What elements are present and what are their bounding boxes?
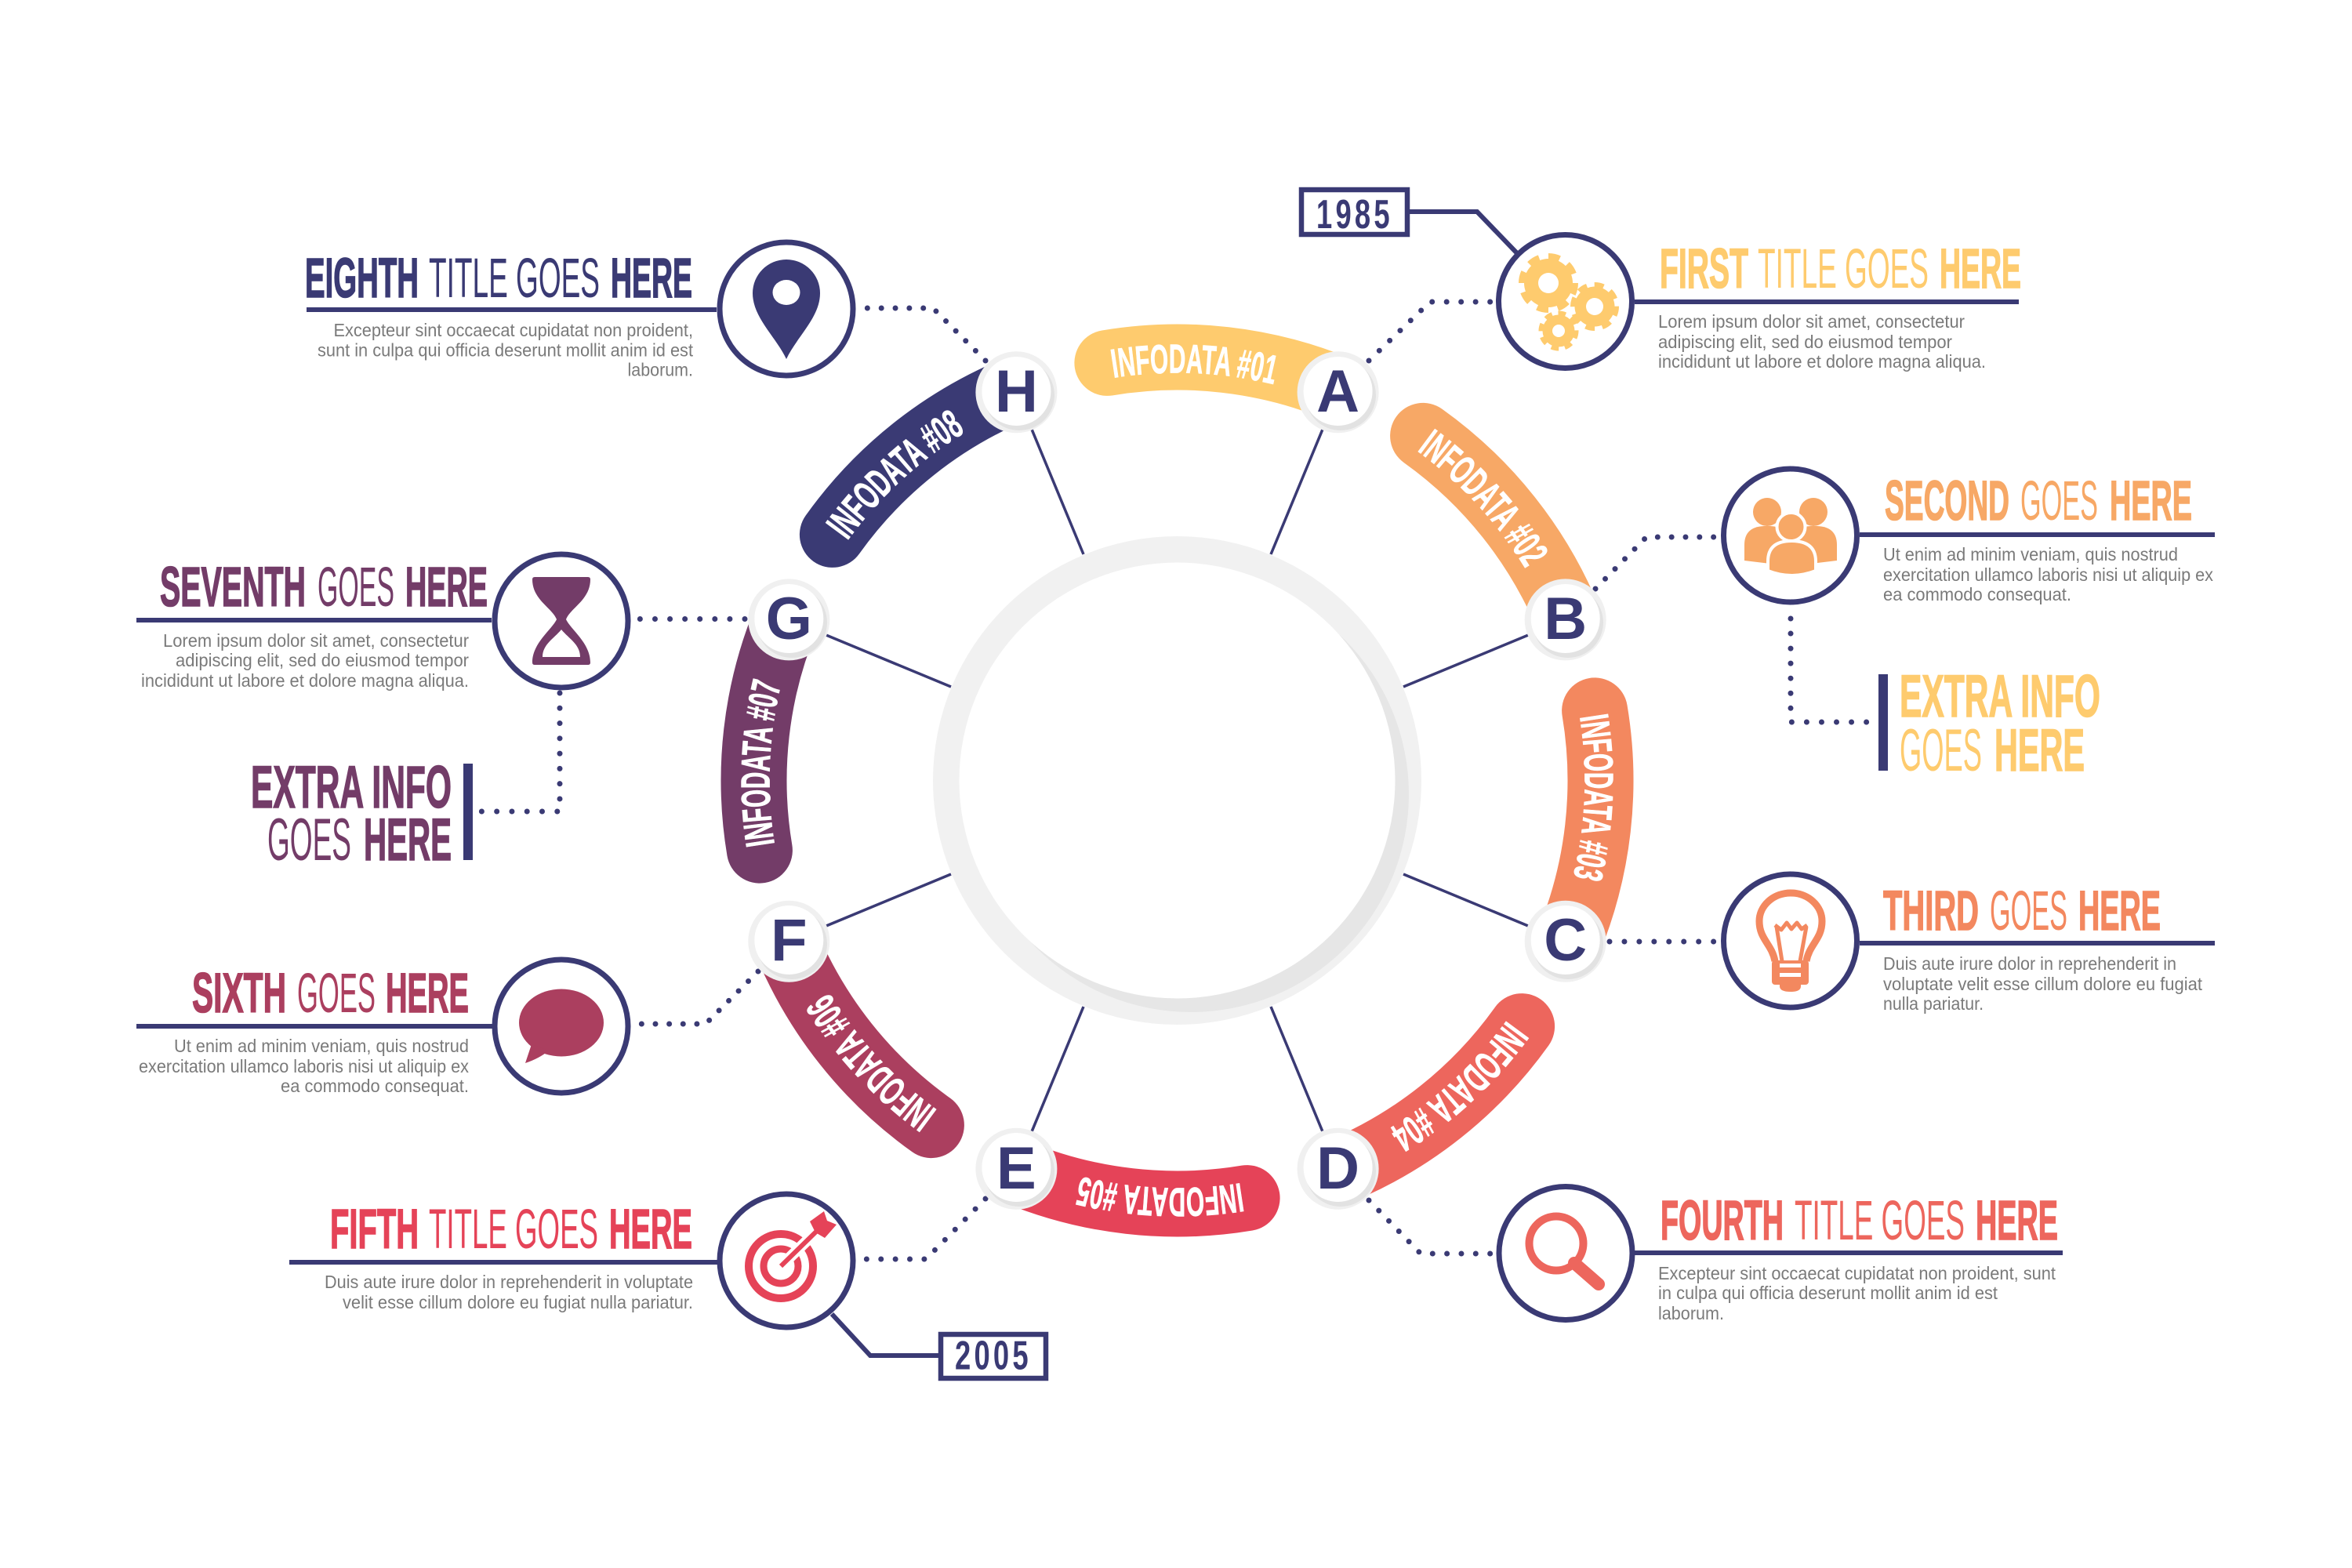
node A: A — [1316, 358, 1359, 425]
title — [330, 1199, 692, 1261]
body text — [1658, 311, 1986, 372]
node D — [1298, 1128, 1379, 1210]
icon: location pin — [720, 242, 853, 376]
body text — [318, 320, 694, 379]
dotted connector E — [866, 1199, 985, 1259]
title — [1660, 238, 2021, 300]
node C: C — [1544, 907, 1587, 974]
year tag 2005 — [832, 1314, 1046, 1378]
title: SECOND — [1885, 470, 2009, 532]
body text: Duis aute irure dolor in reprehenderit in voluptate — [325, 1272, 693, 1292]
title: GOES — [318, 557, 394, 619]
node D: D — [1316, 1135, 1359, 1202]
title: HERE — [1940, 238, 2021, 300]
panel: sixth — [136, 960, 628, 1096]
icon: light bulb — [1723, 874, 1857, 1007]
icon: hourglass — [495, 554, 628, 688]
band: infodata 02: INFODATA #02 — [1417, 428, 1548, 568]
title: HERE — [1976, 1190, 2058, 1252]
body text: velit esse cillum dolore eu fugiat nulla pariatur. — [343, 1292, 693, 1312]
dotted connector C — [1610, 939, 1714, 944]
band: infodata 04: INFODATA #04 — [1391, 1021, 1529, 1152]
year tag 2005: 2005 — [955, 1332, 1032, 1378]
title: SEVENTH — [160, 557, 306, 619]
body text: laborum. — [627, 359, 693, 379]
rule — [1860, 941, 2215, 946]
title: HERE — [2110, 470, 2192, 532]
body text: Lorem ipsum dolor sit amet, consectetur — [1658, 311, 1965, 332]
body text: laborum. — [1658, 1303, 1724, 1323]
dotted connector H — [867, 308, 985, 361]
title — [1661, 1190, 2058, 1252]
body text: incididunt ut labore et dolore magna aliqua. — [141, 670, 469, 691]
extra info right: HERE — [1994, 717, 2085, 784]
title — [192, 963, 469, 1025]
panel: third — [1723, 874, 2215, 1014]
node F: F — [771, 907, 808, 974]
band: infodata 07: INFODATA #07 — [741, 678, 780, 847]
extra info left: EXTRA INFO — [251, 754, 452, 821]
band: infodata 07 — [721, 624, 808, 882]
icon: target — [720, 1194, 853, 1327]
extra info right: EXTRA INFO — [1900, 663, 2100, 730]
body text: adipiscing elit, sed do eiusmod tempor — [1658, 332, 1952, 352]
node G: G — [766, 586, 812, 652]
node E: E — [996, 1135, 1036, 1202]
rule — [136, 1024, 492, 1029]
node C — [1525, 901, 1606, 982]
title: HERE — [386, 963, 469, 1025]
node G — [748, 579, 829, 660]
band: infodata 01 — [1076, 325, 1334, 411]
node B: B — [1544, 586, 1587, 652]
body text: adipiscing elit, sed do eiusmod tempor — [176, 650, 469, 670]
body text: Excepteur sint occaecat cupidatat non proident, — [334, 320, 693, 340]
body text: ea commodo consequat. — [1883, 584, 2071, 604]
title: HERE — [405, 557, 488, 619]
icon: speech bubble — [495, 960, 628, 1093]
title: HERE — [611, 248, 692, 310]
body text: Duis aute irure dolor in reprehenderit in — [1883, 953, 2176, 974]
dotted connector B extra — [1791, 619, 1867, 722]
title: HERE — [609, 1199, 692, 1261]
spokes — [789, 392, 1566, 1169]
icon: gears — [1499, 235, 1632, 368]
body text — [1658, 1263, 2056, 1323]
body text: sunt in culpa qui officia deserunt mollit anim id est — [318, 340, 694, 361]
band: infodata 05: INFODATA #05 — [1076, 1178, 1243, 1217]
dotted connector F — [641, 971, 758, 1024]
body text: ea commodo consequat. — [281, 1076, 469, 1096]
body text: exercitation ullamco laboris nisi ut aliquip ex — [1883, 564, 2213, 585]
body text — [325, 1272, 693, 1312]
band: infodata 03 — [1548, 679, 1634, 937]
band: infodata 08: INFODATA #08 — [825, 410, 963, 540]
extra info left: GOES — [267, 807, 351, 873]
title: FIFTH — [330, 1199, 419, 1261]
band: infodata 02 — [1390, 403, 1591, 607]
band: infodata 06 — [764, 954, 964, 1159]
panel: fourth — [1499, 1187, 2063, 1323]
node F — [748, 901, 829, 982]
body text: nulla pariatur. — [1883, 993, 1984, 1014]
panel: first — [1499, 235, 2021, 372]
rule — [289, 1260, 717, 1265]
year tag 1985: 1985 — [1316, 191, 1393, 238]
rule — [1860, 532, 2215, 537]
body text: in culpa qui officia deserunt mollit anim id est — [1658, 1283, 1998, 1303]
band: infodata 04 — [1351, 993, 1555, 1194]
band: infodata 08 — [800, 367, 1004, 568]
band: infodata 01: INFODATA #01 — [1110, 344, 1276, 384]
band: infodata 03: INFODATA #03 — [1574, 713, 1613, 881]
title: GOES — [1990, 880, 2067, 942]
central ring — [933, 536, 1421, 1025]
node A — [1298, 351, 1379, 433]
node E — [975, 1128, 1057, 1210]
body text: Lorem ipsum dolor sit amet, consectetur — [163, 630, 469, 651]
rule — [136, 618, 492, 622]
band: infodata 06: INFODATA #06 — [807, 995, 936, 1132]
title: FIRST — [1660, 238, 1748, 300]
band: infodata 05 — [1021, 1151, 1279, 1237]
body text: voluptate velit esse cillum dolore eu fugiat — [1883, 974, 2203, 994]
title: GOES — [2020, 470, 2098, 532]
title: TITLE GOES — [1795, 1190, 1965, 1252]
extra info right: GOES — [1900, 717, 1982, 784]
title: GOES — [297, 963, 376, 1025]
title: SIXTH — [192, 963, 286, 1025]
title: TITLE GOES — [429, 1199, 598, 1261]
title: EIGHTH — [305, 248, 419, 310]
title — [1883, 880, 2161, 942]
body text — [139, 1036, 469, 1096]
panel: seventh — [136, 554, 628, 691]
body text — [141, 630, 469, 691]
extra info left — [251, 754, 473, 873]
dotted connector D — [1369, 1200, 1490, 1254]
title: HERE — [2078, 880, 2161, 942]
title: THIRD — [1883, 880, 1979, 942]
extra info left: HERE — [364, 807, 452, 873]
body text: incididunt ut labore et dolore magna aliqua. — [1658, 351, 1986, 372]
body text — [1883, 544, 2213, 604]
extra info right — [1878, 663, 2100, 784]
body text: exercitation ullamco laboris nisi ut aliquip ex — [139, 1056, 469, 1076]
rule — [307, 307, 717, 312]
dotted connector A — [1369, 302, 1490, 361]
body text — [1883, 953, 2203, 1014]
icon: people — [1723, 469, 1857, 602]
body text: Excepteur sint occaecat cupidatat non proident, sunt — [1658, 1263, 2056, 1283]
title: TITLE GOES — [429, 248, 600, 310]
year tag 1985 — [1301, 190, 1517, 253]
node H: H — [995, 358, 1038, 425]
dotted connector G extra — [481, 693, 560, 811]
dotted connector B — [1595, 537, 1714, 589]
body text: Ut enim ad minim veniam, quis nostrud — [174, 1036, 469, 1056]
dotted connector G — [640, 616, 745, 622]
node B — [1525, 579, 1606, 660]
icon: magnifier — [1499, 1187, 1632, 1320]
node H — [975, 351, 1057, 433]
panel: eighth — [305, 242, 853, 379]
rule — [1635, 299, 2019, 304]
rule — [1635, 1250, 2063, 1255]
panel: second — [1723, 469, 2215, 604]
body text: Ut enim ad minim veniam, quis nostrud — [1883, 544, 2178, 564]
title: TITLE GOES — [1758, 238, 1929, 300]
title — [305, 248, 692, 310]
panel: fifth — [289, 1194, 853, 1327]
title: FOURTH — [1661, 1190, 1784, 1252]
